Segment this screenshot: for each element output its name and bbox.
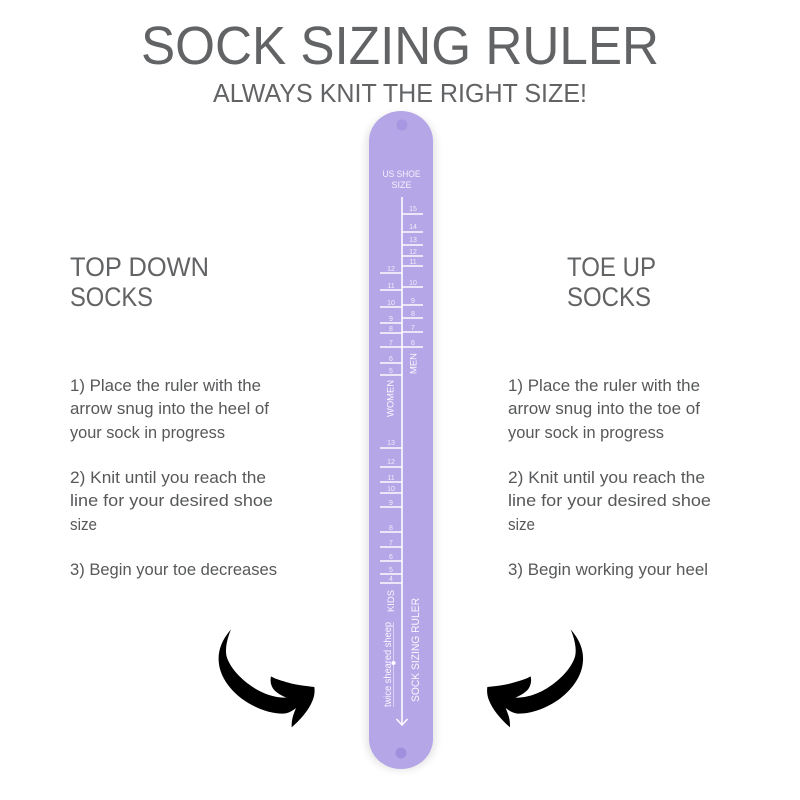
men scale: MEN <box>408 353 418 374</box>
panel: toe up socks <box>508 252 711 579</box>
text block: toe up instructions: size <box>508 516 535 534</box>
heading: toe up socks <box>567 252 656 312</box>
kids scale: 11 <box>387 475 395 482</box>
label: us shoe size: SIZE <box>391 180 412 190</box>
men scale: 12 <box>409 249 417 256</box>
label: us shoe size: US SHOE <box>382 169 420 179</box>
kids scale: 5 <box>389 567 393 574</box>
men scale <box>402 206 423 374</box>
women scale: 7 <box>389 340 393 347</box>
women scale <box>380 266 402 417</box>
bottom hole <box>396 748 406 758</box>
women scale: 9 <box>389 316 393 323</box>
kids scale: 8 <box>389 525 393 532</box>
text block: toe up instructions: 3) Begin working your heel <box>508 561 708 579</box>
heading: toe up socks: SOCKS <box>567 282 651 312</box>
men scale: 8 <box>411 311 415 318</box>
women scale: 6 <box>389 356 393 363</box>
heading: top down socks: SOCKS <box>70 282 153 312</box>
kids scale: KIDS <box>386 590 396 612</box>
women scale: 8 <box>389 326 393 333</box>
women scale: 5 <box>389 368 393 375</box>
kids scale: 7 <box>389 540 393 547</box>
brand name: twice sheared sheep <box>382 622 394 707</box>
text block: top down instructions: size <box>70 516 97 534</box>
label: us shoe size <box>382 169 420 190</box>
men scale: 9 <box>411 298 415 305</box>
kids scale: 12 <box>387 459 395 466</box>
text block: top down instructions: 2) Knit until you reach the <box>70 469 266 487</box>
text block: toe up instructions: 2) Knit until you reach the <box>508 469 705 487</box>
subtitle: ALWAYS KNIT THE RIGHT SIZE! <box>213 78 587 108</box>
text block: top down instructions: your sock in progress <box>70 424 225 442</box>
men scale: 11 <box>409 259 417 266</box>
text block: toe up instructions: line for your desired shoe <box>508 492 711 510</box>
men scale: 13 <box>409 237 417 244</box>
men scale: 10 <box>409 280 417 287</box>
men scale: 7 <box>411 325 415 332</box>
women scale: WOMEN <box>386 380 396 417</box>
center line with arrow <box>396 197 408 725</box>
women scale: 10 <box>387 300 395 307</box>
kids scale: 6 <box>389 554 393 561</box>
men scale: 6 <box>411 340 415 347</box>
arrow: right curved arrow <box>487 629 583 727</box>
text block: top down instructions <box>70 377 277 579</box>
ruler name: SOCK SIZING RULER <box>410 598 422 702</box>
title: SOCK SIZING RULER <box>141 16 659 76</box>
text block: toe up instructions: your sock in progress <box>508 424 664 442</box>
kids scale <box>380 440 402 612</box>
text block: toe up instructions: arrow snug into the toe of <box>508 400 700 418</box>
text block: top down instructions: arrow snug into the heel of <box>70 400 269 418</box>
text block: top down instructions: 3) Begin your toe decreases <box>70 561 277 579</box>
men scale: 14 <box>409 224 417 231</box>
ruler body <box>369 111 433 769</box>
top hole <box>396 120 408 130</box>
kids scale: 10 <box>387 486 395 493</box>
heading: toe up socks: TOE UP <box>567 252 656 282</box>
ruler <box>366 111 436 770</box>
kids scale: 9 <box>389 500 393 507</box>
men scale: 15 <box>409 206 417 213</box>
kids scale: 13 <box>387 440 395 447</box>
text block: top down instructions: line for your desired shoe <box>70 492 273 510</box>
women scale: 12 <box>387 266 395 273</box>
women scale: 11 <box>387 283 395 290</box>
text block: top down instructions: 1) Place the ruler with the <box>70 377 261 395</box>
arrow: left curved arrow <box>219 629 315 727</box>
text block: toe up instructions <box>508 377 711 579</box>
heading: top down socks: TOP DOWN <box>70 252 209 282</box>
kids scale: 4 <box>389 576 393 583</box>
text block: toe up instructions: 1) Place the ruler with the <box>508 377 700 395</box>
panel: top down socks <box>70 252 277 579</box>
heading: top down socks <box>70 252 209 312</box>
